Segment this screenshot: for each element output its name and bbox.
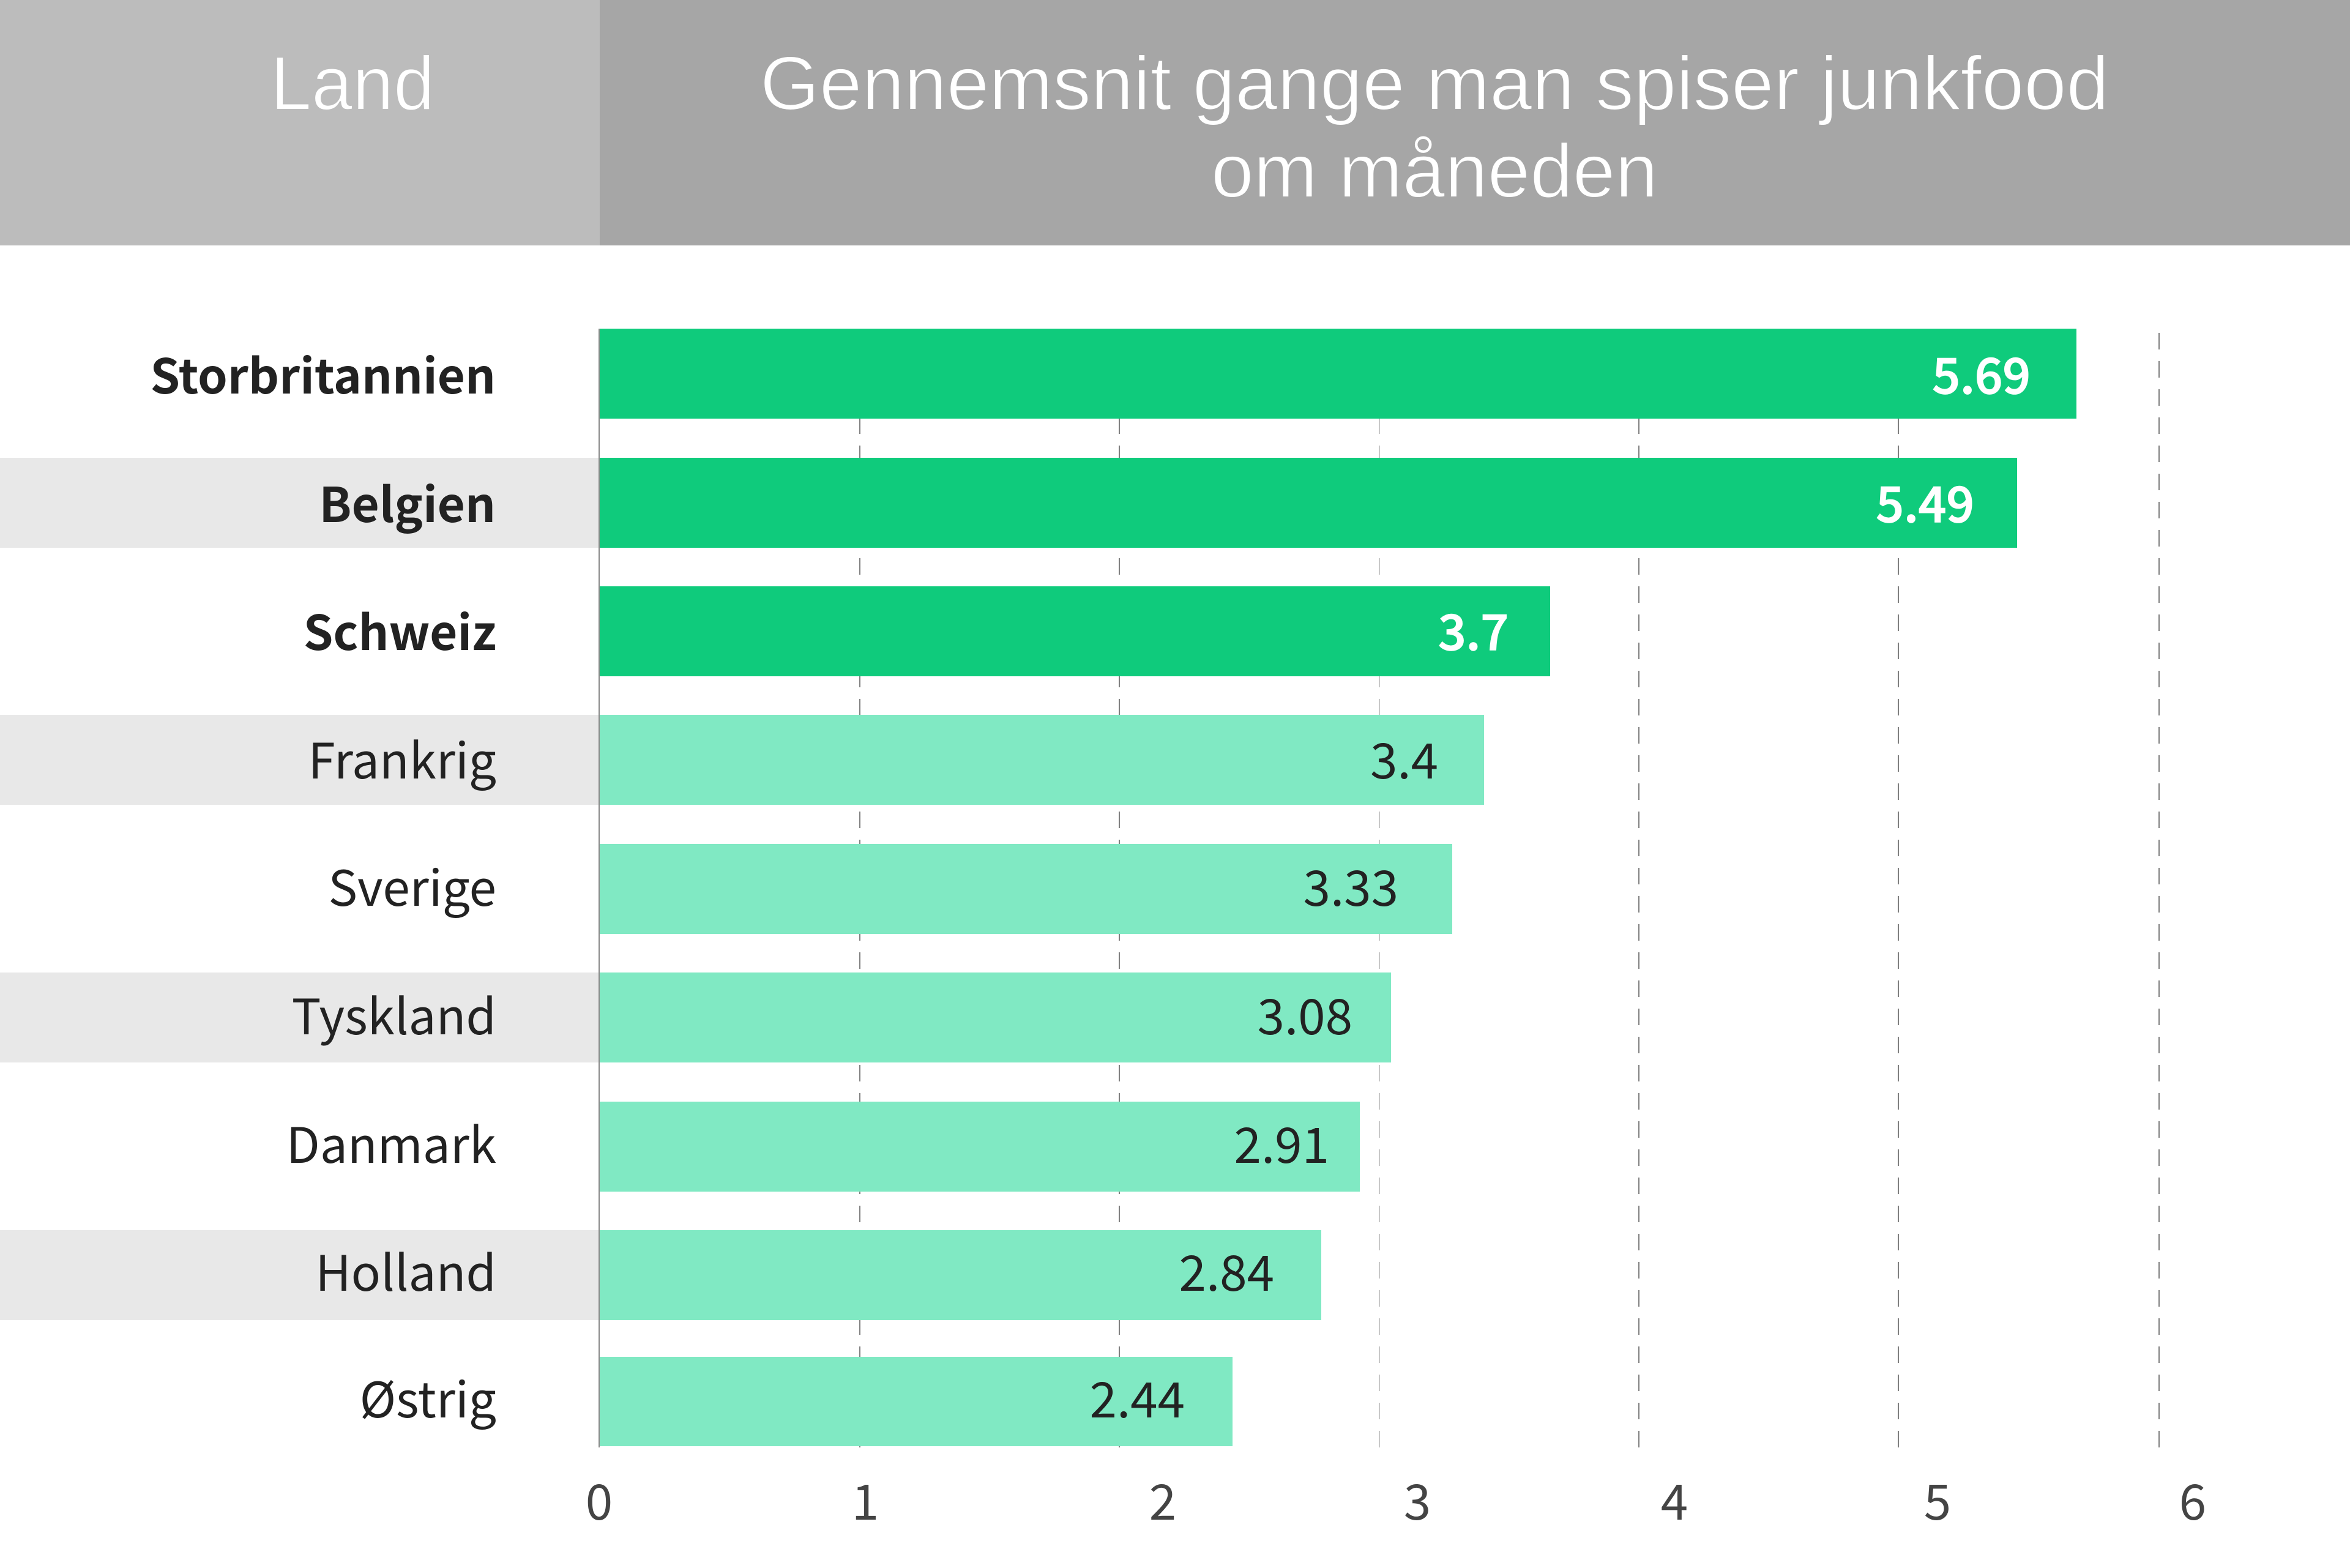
x axis labels: 3	[1404, 1463, 1431, 1534]
bar: Schweiz: Schweiz	[304, 595, 496, 664]
bar: Danmark	[286, 1102, 1360, 1192]
x axis labels: 1	[852, 1463, 879, 1534]
bar: Danmark: Danmark	[286, 1107, 496, 1178]
bar: Sverige: Sverige	[328, 849, 496, 920]
bar: Frankrig: 3.4	[1370, 722, 1438, 793]
bar: Holland: Holland	[315, 1234, 496, 1305]
bar: Schweiz	[304, 586, 1550, 676]
header: average column: Gennemsnit gange man spiser junkfood	[760, 42, 2109, 126]
x axis labels: 0	[586, 1463, 613, 1534]
bar: Belgien	[319, 458, 2017, 548]
bar: Storbritannien	[150, 329, 2076, 419]
bar: Frankrig	[308, 715, 1484, 805]
bar: Østrig	[360, 1357, 1233, 1446]
header: land column: Land	[270, 42, 435, 126]
x axis labels: 6	[2179, 1463, 2206, 1534]
bar: Danmark: 2.91	[1234, 1107, 1329, 1178]
bar: Schweiz: 3.7	[1438, 594, 1509, 665]
x axis labels: 2	[1149, 1463, 1176, 1534]
bar: Sverige	[328, 844, 1452, 934]
y axis line	[599, 329, 600, 1447]
x axis labels: 5	[1924, 1463, 1951, 1534]
bar: Tyskland: 3.08	[1258, 978, 1352, 1049]
bar: Storbritannien: 5.69	[1932, 337, 2031, 408]
x axis labels: 4	[1661, 1463, 1688, 1534]
bar: Storbritannien: Storbritannien	[150, 339, 496, 408]
header: average column: om måneden	[1211, 129, 1658, 214]
bar: Tyskland: Tyskland	[292, 978, 496, 1049]
bar: Østrig: Østrig	[360, 1361, 496, 1432]
bar: Frankrig: Frankrig	[308, 722, 496, 793]
bar: Holland: 2.84	[1179, 1234, 1274, 1305]
x axis labels	[586, 1463, 2206, 1534]
bar: Tyskland	[292, 973, 1391, 1062]
bar: Holland	[315, 1230, 1321, 1320]
gridlines	[860, 333, 2159, 1447]
bar: Belgien: Belgien	[319, 468, 496, 536]
bar: Østrig: 2.44	[1090, 1361, 1185, 1432]
header: land column	[0, 0, 600, 245]
row stripes	[0, 458, 599, 1320]
bar: Sverige: 3.33	[1304, 849, 1398, 920]
bar: Belgien: 5.49	[1876, 466, 1974, 537]
bar chart	[150, 329, 2076, 1446]
header: average column	[600, 0, 2350, 245]
